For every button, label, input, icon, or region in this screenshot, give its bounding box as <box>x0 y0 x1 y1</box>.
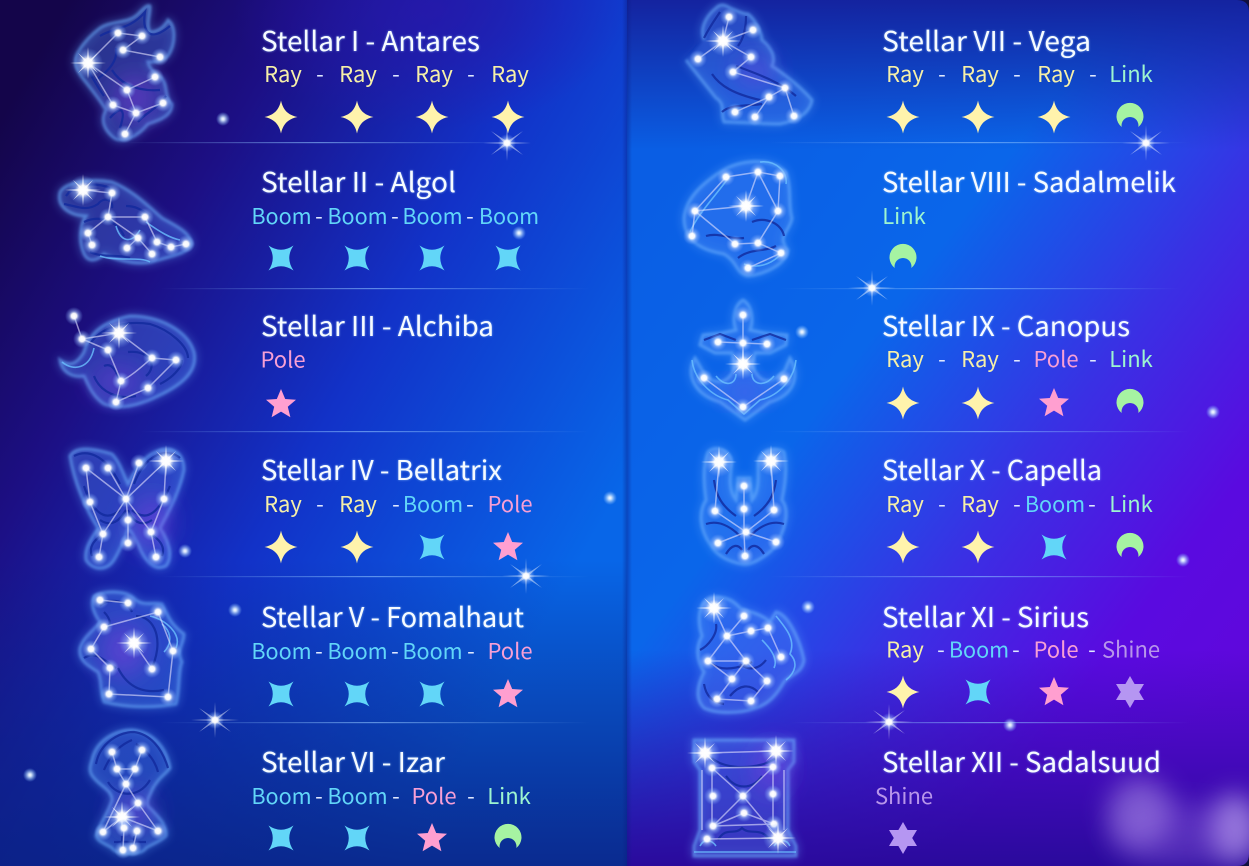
labels: Pole <box>411 779 457 811</box>
heading: Stellar XI - Sirius <box>882 596 1089 635</box>
labels: - <box>315 779 323 811</box>
labels <box>886 342 1153 374</box>
icon: Sirius constellation <box>696 592 804 712</box>
labels <box>251 779 531 811</box>
labels <box>251 634 533 666</box>
panel: Stellar VIII - Sadalmelik <box>683 161 1176 277</box>
labels: Shine <box>875 779 933 811</box>
labels: Boom <box>479 200 539 231</box>
icon: Algol constellation <box>59 174 195 263</box>
heading: Stellar VI - Izar <box>261 741 446 780</box>
labels: Ray <box>264 57 302 89</box>
panel: Stellar IX - Canopus <box>691 300 1153 420</box>
icon: Shine <box>889 822 917 854</box>
icon: Capella constellation <box>701 445 789 565</box>
labels: - <box>1012 632 1020 664</box>
heading: Stellar VII - Vega <box>882 20 1091 59</box>
icons: Ray, Ray, Pole, Link <box>886 386 1144 420</box>
icon: Fomalhaut constellation <box>80 591 184 707</box>
labels <box>886 632 1160 664</box>
heading: Stellar IX - Canopus <box>882 305 1130 344</box>
icon: Bellatrix constellation <box>70 445 184 568</box>
labels: - <box>1088 632 1096 664</box>
labels: Boom <box>251 780 312 811</box>
heading: Stellar III - Alchiba <box>261 305 494 344</box>
labels: - <box>315 634 323 666</box>
labels: - <box>316 57 324 89</box>
heading: Stellar IV - Bellatrix <box>261 449 503 488</box>
labels: Link <box>1109 57 1153 89</box>
icon: Izar constellation <box>90 730 170 859</box>
labels: - <box>392 487 400 519</box>
labels: Ray <box>1037 57 1075 89</box>
decorative sparkles and dots <box>23 112 1220 782</box>
labels: - <box>391 634 399 666</box>
heading: Stellar V - Fomalhaut <box>261 596 524 635</box>
background: soft light clouds <box>1108 778 1249 866</box>
panel: Stellar III - Alchiba <box>60 305 494 417</box>
labels: Boom <box>1025 488 1085 519</box>
labels: - <box>938 342 946 374</box>
labels: - <box>315 199 323 231</box>
labels: Boom <box>949 634 1009 664</box>
panel: Stellar VII - Vega <box>686 5 1153 134</box>
labels: Link <box>1109 342 1153 374</box>
labels: Ray <box>491 57 529 89</box>
labels: - <box>1013 342 1021 374</box>
labels <box>251 199 539 231</box>
labels: - <box>467 634 475 666</box>
panel: Stellar IV - Bellatrix <box>70 445 533 568</box>
labels: - <box>938 487 946 519</box>
labels: Ray <box>264 487 302 519</box>
icon: Vega constellation <box>686 5 812 126</box>
labels: Boom <box>327 780 388 811</box>
labels: - <box>1089 342 1097 374</box>
labels: Boom <box>251 635 312 666</box>
icon: Antares constellation <box>70 5 174 143</box>
panel: Stellar I - Antares <box>70 5 529 143</box>
icon: Link <box>890 244 916 268</box>
labels: Ray <box>886 487 924 519</box>
background: left page <box>0 0 628 866</box>
labels: Ray <box>961 57 999 89</box>
labels: - <box>1013 57 1021 89</box>
icons: Ray, Boom, Pole, Shine <box>886 676 1144 708</box>
heading: Stellar X - Capella <box>882 449 1102 488</box>
icons: Boom, Boom, Pole, Link <box>268 823 522 851</box>
icons: Boom, Boom, Boom, Pole <box>268 679 523 707</box>
labels: Ray <box>339 57 377 89</box>
panel: Stellar XI - Sirius <box>696 592 1160 712</box>
icons: Ray, Ray, Boom, Pole <box>264 530 523 564</box>
heading: Stellar XII - Sadalsuud <box>882 741 1161 780</box>
icons: four Ray <box>264 100 524 134</box>
labels: - <box>316 487 324 519</box>
labels: Pole <box>1033 342 1079 374</box>
labels: Ray <box>886 632 924 664</box>
labels <box>886 57 1153 89</box>
labels <box>886 487 1153 519</box>
heading: Stellar VIII - Sadalmelik <box>882 161 1176 200</box>
labels: - <box>391 199 399 231</box>
labels: - <box>392 779 400 811</box>
row dividers <box>120 142 1190 723</box>
labels: - <box>1088 487 1096 519</box>
labels: - <box>1013 487 1021 519</box>
labels: Ray <box>886 342 924 374</box>
labels: - <box>466 487 474 519</box>
labels: Boom <box>327 635 388 666</box>
labels: Pole <box>1033 632 1079 664</box>
labels: - <box>466 199 474 231</box>
page corners <box>1237 0 1249 866</box>
labels: Link <box>1109 487 1153 519</box>
labels: - <box>392 57 400 89</box>
labels: Boom <box>327 200 388 231</box>
icons: Ray, Ray, Ray, Link <box>886 100 1144 134</box>
labels: Ray <box>415 57 453 89</box>
labels: Pole <box>260 342 306 374</box>
panel: Stellar XII - Sadalsuud <box>687 735 1161 856</box>
labels: Ray <box>339 487 377 519</box>
icon: Sadalmelik constellation <box>683 161 792 277</box>
labels: Boom <box>402 200 463 231</box>
heading: Stellar II - Algol <box>261 161 456 200</box>
labels: Pole <box>487 487 533 519</box>
labels: Link <box>487 779 531 811</box>
panel: Stellar II - Algol <box>59 161 539 270</box>
labels: Ray <box>961 487 999 519</box>
heading: Stellar I - Antares <box>261 20 480 59</box>
labels: Ray <box>961 342 999 374</box>
labels: Boom <box>402 635 463 666</box>
labels <box>264 487 533 519</box>
panel: Stellar X - Capella <box>701 445 1153 565</box>
labels: Ray <box>886 57 924 89</box>
panel: Stellar V - Fomalhaut <box>80 591 533 707</box>
labels: - <box>1089 57 1097 89</box>
icon: Pole <box>266 389 296 417</box>
labels: - <box>467 57 475 89</box>
icon: Sadalsuud constellation <box>687 735 796 856</box>
icon: Canopus constellation <box>691 300 796 420</box>
labels: Boom <box>251 200 312 231</box>
labels: Link <box>882 199 926 231</box>
labels: - <box>467 779 475 811</box>
labels: - <box>938 57 946 89</box>
labels: Shine <box>1102 632 1160 664</box>
panel: Stellar VI - Izar <box>90 730 531 859</box>
icon: Alchiba constellation <box>60 307 195 411</box>
icons: Ray, Ray, Boom, Link <box>886 530 1144 564</box>
icons: four Boom <box>268 246 520 270</box>
labels: Boom <box>403 488 463 519</box>
labels: - <box>937 632 945 664</box>
labels: Pole <box>487 634 533 666</box>
labels <box>264 57 529 89</box>
